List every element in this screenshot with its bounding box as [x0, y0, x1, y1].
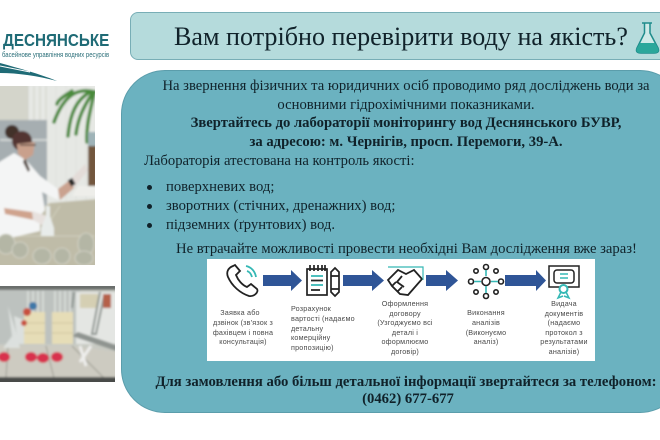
step 2 label: детальну — [291, 324, 323, 333]
bullet — [147, 223, 152, 228]
step 4 label: аналіз) — [474, 337, 498, 346]
contact address: Звертайтесь до лабораторії моніторингу вод Деснянського БУВР, — [191, 115, 621, 131]
step 4 label: аналізів — [472, 318, 500, 327]
step 3 label: Оформлення — [382, 299, 428, 308]
step 3 label: оформлюємо — [381, 337, 429, 346]
step 2 label: вартості (надаємо — [291, 314, 355, 323]
step 5 label: документів — [545, 309, 583, 318]
step 3 label — [377, 299, 433, 356]
contact address — [191, 115, 621, 150]
intro text — [162, 78, 650, 113]
photo: laboratory technician — [0, 86, 95, 265]
water types list: поверхневих вод; — [166, 179, 274, 195]
step 4 label — [466, 308, 506, 346]
icon: handshake — [388, 267, 423, 295]
step 4 label: (Виконуємо — [466, 328, 506, 337]
step 2 label: Розрахунок — [291, 304, 332, 313]
accreditation heading: Лабораторія атестована на контроль якості: — [144, 153, 415, 169]
step 5 label: Видача — [551, 299, 577, 308]
step 2 label: комерційну — [291, 333, 331, 342]
step 1 label: фахівцем і повна — [213, 328, 273, 337]
step 5 label — [540, 299, 588, 356]
water types list: підземних (ґрунтових) вод. — [166, 217, 335, 233]
main information panel — [121, 70, 660, 413]
footer contact: Для замовлення або більш детальної інформації звертайтеся за телефоном: — [155, 374, 657, 390]
title text: Вам потрібно перевірити воду на якість? — [174, 22, 628, 51]
icon: flask — [636, 22, 660, 54]
step 2 label — [291, 304, 355, 352]
logo wave — [0, 63, 57, 81]
step 1 label: дзвінок (зв'язок з — [213, 318, 274, 327]
process diagram — [207, 259, 595, 361]
water types list: зворотних (стічних, дренажних) вод; — [166, 198, 395, 214]
intro text: На звернення фізичних та юридичних осіб проводимо ряд досліджень води за — [162, 78, 650, 94]
photo: test tubes and petri dishes — [0, 286, 115, 382]
arrow 2 — [343, 270, 384, 291]
icon: notepad and pencil — [307, 265, 339, 296]
arrow 4 — [505, 270, 546, 291]
step 5 label: результатами — [540, 337, 588, 346]
step 5 label: аналізів) — [549, 347, 579, 356]
step 1 label: консультація) — [219, 337, 267, 346]
contact address: за адресою: м. Чернігів, просп. Перемоги, 39-А. — [249, 134, 562, 150]
logo subtitle: басейнове управління водних ресурсів — [2, 52, 109, 59]
call to action: Не втрачайте можливості провести необхідні Вам дослідження вже зараз! — [176, 241, 637, 257]
step 2 label: пропозицію) — [291, 343, 334, 352]
logo wordmark: ДЕСНЯНСЬКЕ — [3, 30, 109, 50]
icon: certificate — [549, 266, 579, 298]
step 4 label: Виконання — [467, 308, 505, 317]
step 3 label: договір) — [391, 347, 419, 356]
bullet — [147, 204, 152, 209]
logo — [0, 30, 109, 81]
step 1 label — [213, 308, 274, 346]
footer contact — [155, 374, 657, 407]
step 5 label: протокол з — [545, 328, 583, 337]
step 1 label: Заявка або — [220, 308, 260, 317]
water types list — [147, 179, 395, 233]
bullet — [147, 185, 152, 190]
footer contact: (0462) 677-677 — [362, 391, 454, 407]
title banner — [130, 12, 660, 60]
arrow 1 — [263, 270, 302, 291]
arrow 3 — [426, 270, 458, 291]
intro text: основними гідрохімічними показниками. — [277, 97, 535, 113]
step 3 label: договору — [389, 309, 421, 318]
step 5 label: (надаємо — [548, 318, 580, 327]
step 3 label: (Узгоджуємо всі — [377, 318, 433, 327]
step 3 label: деталі і — [392, 328, 418, 337]
icon: analysis network — [468, 264, 504, 298]
icon: phone — [227, 265, 257, 296]
